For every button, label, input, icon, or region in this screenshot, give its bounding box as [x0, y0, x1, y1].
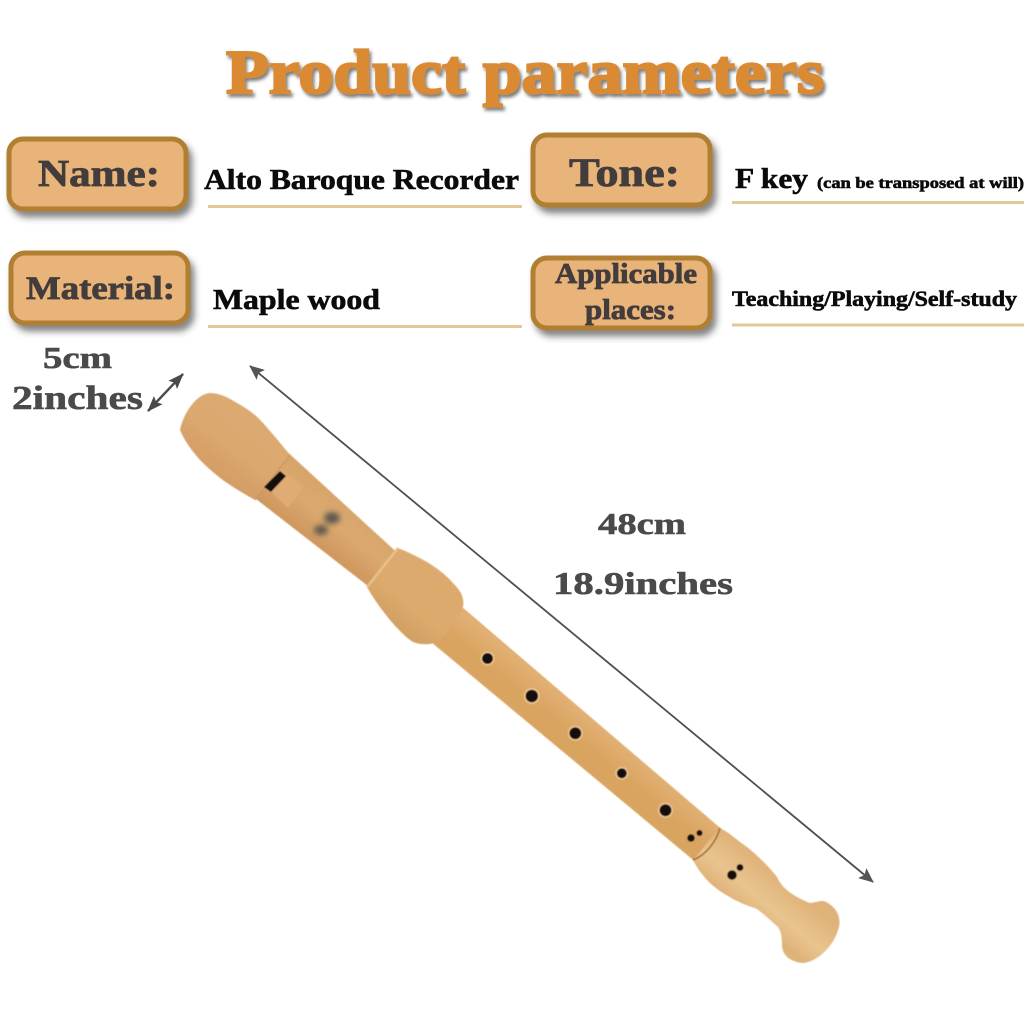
blurred logo mark: [314, 512, 340, 535]
label box: Applicable places: [533, 258, 710, 328]
label box: Tone: [533, 135, 710, 205]
dimension: mouthpiece width: [12, 340, 183, 417]
panel: material row: [11, 253, 522, 326]
upper tube: [247, 447, 404, 593]
recorder illustration: [180, 393, 840, 963]
label box: Name: Name:: [38, 153, 160, 195]
head seam: [255, 455, 290, 500]
panel: applicable places row: [533, 258, 1024, 328]
dimension: recorder length: 18.9inches: [553, 565, 733, 601]
windway: [266, 470, 303, 508]
dimension: mouthpiece width: 5cm: [43, 340, 112, 375]
foot seam: [693, 828, 720, 860]
value: F key: F key: [735, 163, 809, 195]
dimension: recorder length: 48cm: [598, 506, 686, 541]
head joint: [180, 393, 290, 500]
dimension: mouthpiece width: 2inches: [12, 380, 143, 417]
panel: tone row: [533, 135, 1024, 205]
value: Alto Baroque Recorder: Alto Baroque Recorder: [204, 165, 519, 196]
value note: can be transposed at will: (can be transposed at will): [817, 175, 1024, 192]
label box: Name: [9, 139, 186, 209]
hole halos: [480, 652, 673, 818]
finger holes: [482, 653, 743, 880]
arrow: length: [250, 366, 873, 882]
arrow: width: [148, 374, 183, 411]
label box: Material: [11, 253, 188, 323]
socket ring: [367, 548, 398, 587]
label box: Applicable places: places:: [585, 294, 676, 326]
label box: Applicable places: Applicable: [555, 258, 697, 290]
foot joint: [693, 828, 840, 963]
lower tube: [425, 601, 725, 864]
label box: Tone: Tone:: [569, 150, 680, 195]
title: Product parameters: [226, 39, 824, 107]
label box: Material: Material:: [26, 271, 175, 307]
middle socket: [367, 548, 463, 644]
window: [264, 471, 286, 492]
dimension: recorder length: [250, 366, 873, 882]
panel: name row: [9, 139, 522, 209]
value: Teaching/Playing/Self-study: Teaching/Playing/Self-study: [732, 286, 1017, 311]
value: Maple wood: Maple wood: [213, 285, 380, 316]
